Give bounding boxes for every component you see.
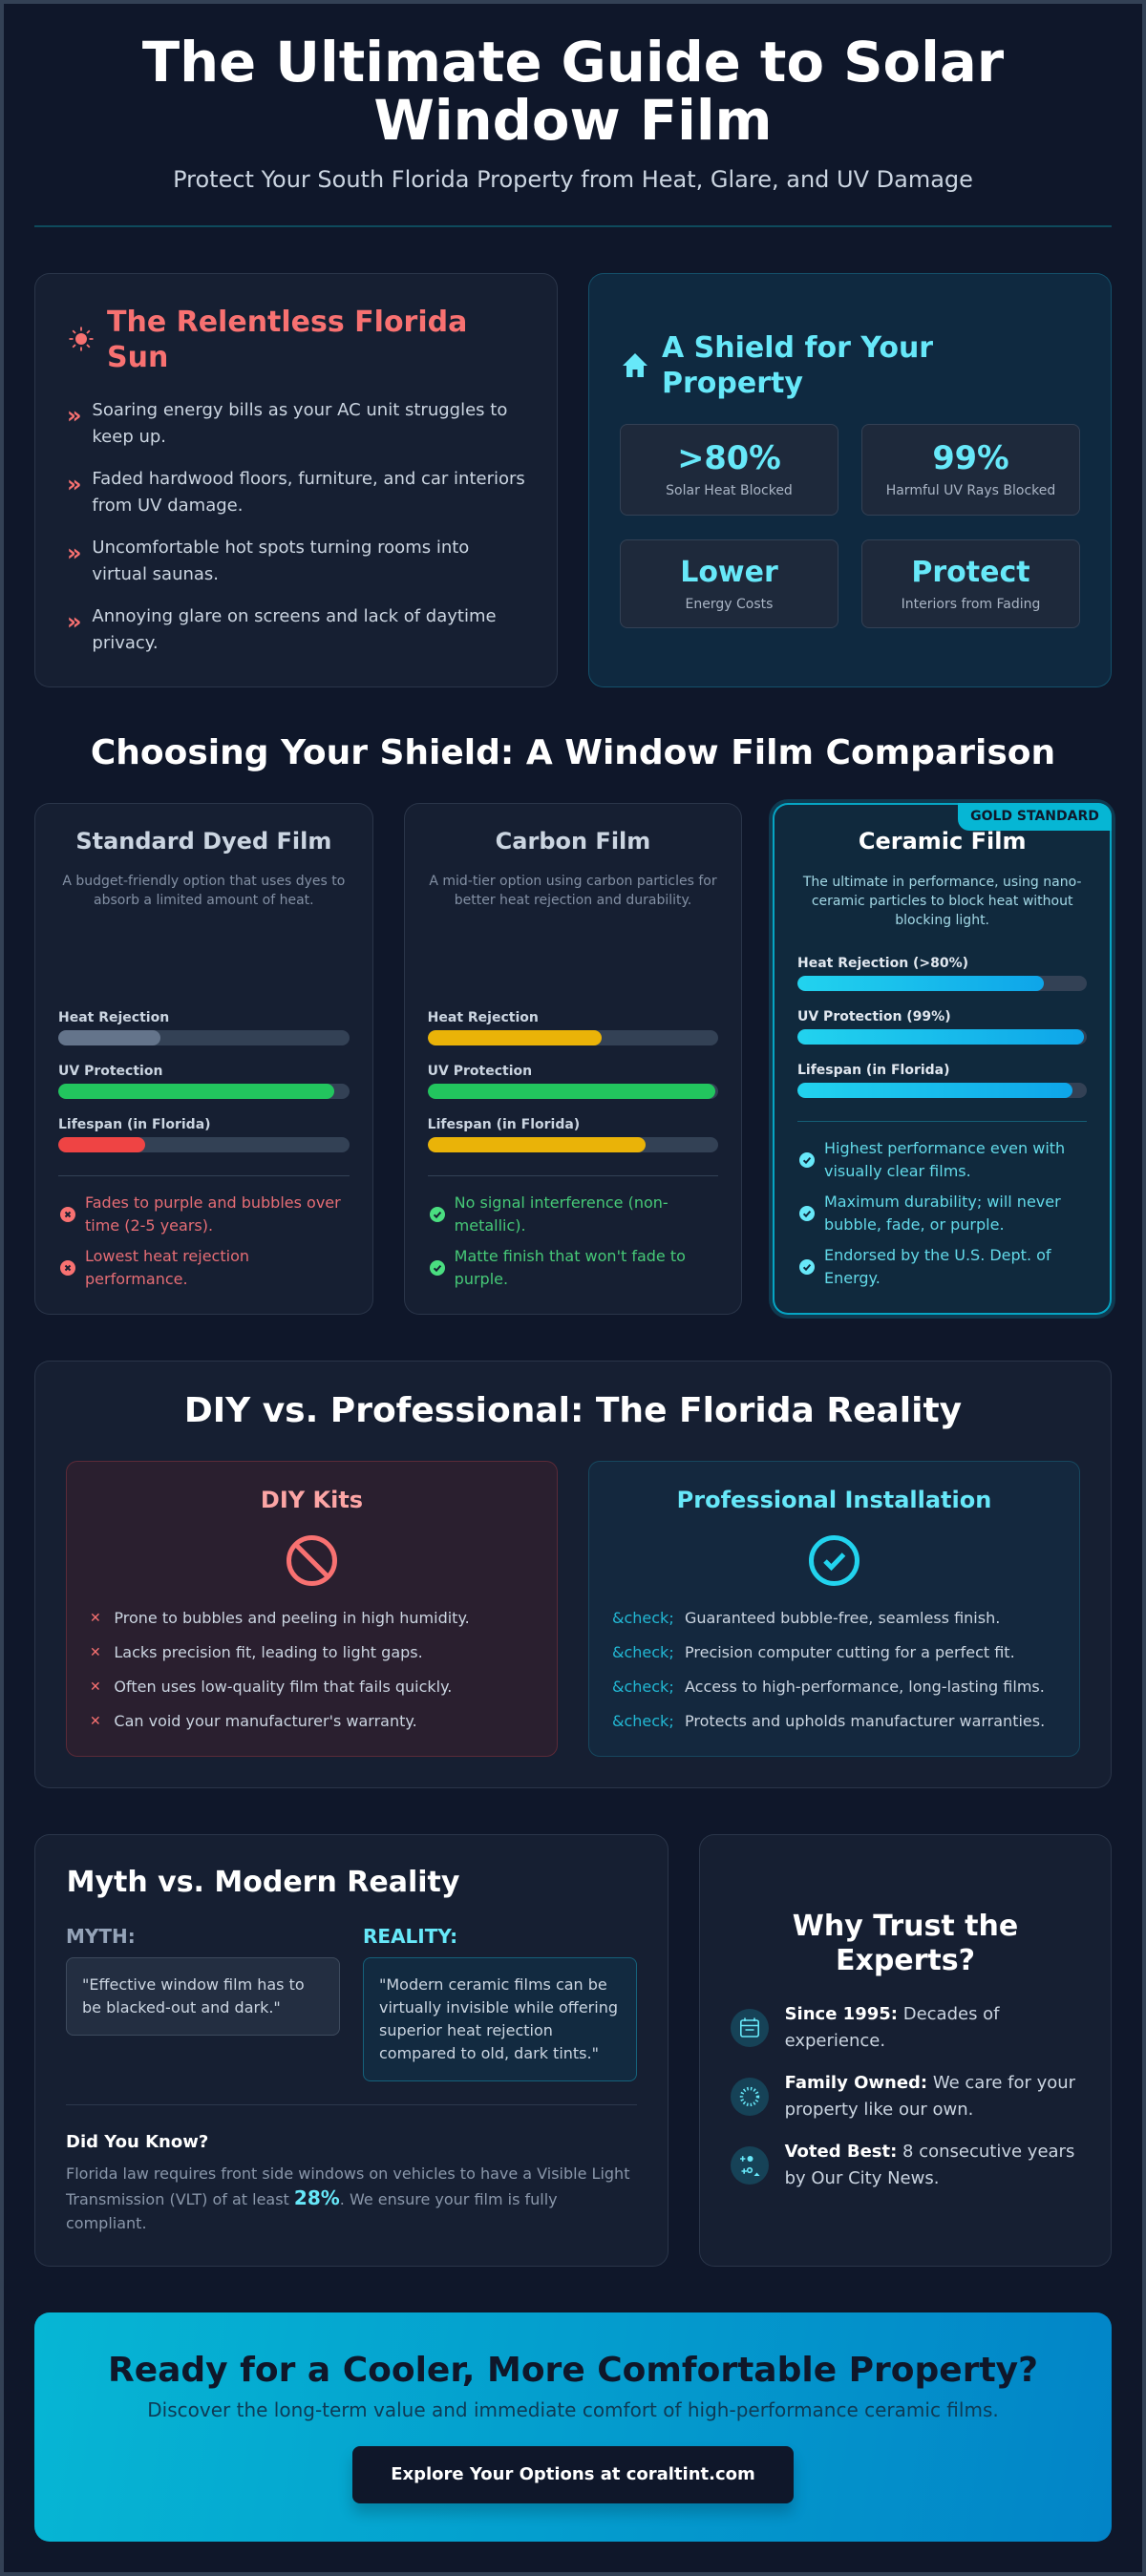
chevron: » xyxy=(67,471,82,497)
pain point: glare xyxy=(92,605,497,653)
reality quote: virtually invisible while offering xyxy=(379,1997,618,2016)
literal check mark: &check; xyxy=(612,1678,674,1696)
title: Window Film xyxy=(373,88,773,153)
heading: myth vs modern reality: Myth vs. Modern Reality xyxy=(67,1866,459,1899)
drawback: Prone to bubbles and peeling in high humidity. xyxy=(114,1609,470,1627)
pain point: hot spots: Uncomfortable hot spots turning rooms into xyxy=(92,537,469,558)
benefit: durability: Maximum durability; will never xyxy=(824,1193,1061,1211)
label: reality: REALITY: xyxy=(363,1925,457,1948)
icon: family xyxy=(731,2078,769,2116)
myth quote xyxy=(66,1957,340,2036)
bar: lifespan xyxy=(797,1062,1087,1098)
chevron: » xyxy=(67,608,82,635)
cross mark: ✕ xyxy=(90,1645,101,1660)
icon: cross xyxy=(60,1207,75,1222)
panel: professional installation xyxy=(588,1461,1080,1757)
reality quote: "Modern ceramic films can be xyxy=(379,1974,607,1994)
myth quote: be blacked-out and dark." xyxy=(82,1997,281,2016)
panel: the relentless florida sun xyxy=(34,273,558,687)
stat: energy costs xyxy=(620,539,838,628)
did you know text xyxy=(66,2163,639,2236)
pain point: energy bills xyxy=(92,399,507,447)
section heading: comparison: Choosing Your Shield: A Window Film Comparison xyxy=(91,733,1055,772)
bar: lifespan: Lifespan (in Florida) xyxy=(58,1117,211,1132)
did you know text: Transmission (VLT) of at least 28%. We ensure your film is fully xyxy=(66,2186,558,2209)
bar: heat rejection xyxy=(428,1010,718,1045)
icon: sun xyxy=(69,327,94,351)
panel: a shield for your property xyxy=(588,273,1112,687)
heading: did you know: Did You Know? xyxy=(66,2132,208,2152)
stat: solar heat xyxy=(620,424,838,516)
literal check mark: &check; xyxy=(612,1712,674,1730)
heading: why trust the experts: Why Trust the xyxy=(793,1910,1018,1943)
reality quote xyxy=(363,1957,637,2081)
bar: uv protection xyxy=(797,1008,1087,1045)
trust point: voted best: by Our City News. xyxy=(785,2168,939,2188)
drawback: Often uses low-quality film that fails quickly. xyxy=(114,1678,452,1696)
benefit: endorsement: Endorsed by the U.S. Dept. of xyxy=(824,1246,1051,1264)
heading: the relentless florida sun xyxy=(107,306,467,374)
trust point: voted best xyxy=(785,2139,1074,2192)
benefit: matte finish: Matte finish that won't fade to xyxy=(455,1247,686,1264)
did you know text: compliant. xyxy=(66,2214,147,2232)
trust point: voted best: Voted Best: 8 consecutive years xyxy=(785,2142,1074,2162)
benefit: no interference: No signal interference (non- xyxy=(455,1193,668,1211)
pain point: fading xyxy=(92,468,525,516)
cta subtext: Discover the long-term value and immediate comfort of high-performance ceramic films. xyxy=(147,2398,999,2421)
chevron: » xyxy=(67,539,82,566)
cross mark: ✕ xyxy=(90,1679,101,1695)
cross mark: ✕ xyxy=(90,1611,101,1626)
card description: A mid-tier option using carbon particles for xyxy=(429,874,717,889)
drawback: heat rejection: performance. xyxy=(85,1270,188,1287)
bar: uv protection: UV Protection (99%) xyxy=(797,1008,951,1024)
subtitle: Protect Your South Florida Property from Heat, Glare, and UV Damage xyxy=(173,166,973,193)
icon: check xyxy=(430,1260,445,1276)
pain point list xyxy=(67,399,525,653)
bar: heat rejection xyxy=(58,1010,350,1045)
bar: heat rejection: Heat Rejection (>80%) xyxy=(797,955,968,970)
panel: diy kits xyxy=(66,1461,558,1757)
drawback: heat rejection xyxy=(85,1247,249,1287)
call to action xyxy=(34,2312,1112,2542)
icon: prohibited xyxy=(286,1535,337,1586)
cta button xyxy=(352,2446,794,2503)
benefit: matte finish xyxy=(455,1247,686,1287)
trust point: family owned xyxy=(785,2070,1075,2123)
benefit: endorsement: Energy. xyxy=(824,1269,881,1287)
title xyxy=(142,31,1004,153)
bar: lifespan xyxy=(58,1117,350,1152)
card description: The ultimate in performance, using nano- xyxy=(803,875,1081,890)
card description xyxy=(429,874,717,908)
cta heading: Ready for a Cooler, More Comfortable Property? xyxy=(108,2351,1038,2390)
card description xyxy=(62,874,345,908)
bar: heat rejection: Heat Rejection xyxy=(58,1010,169,1025)
icon: calendar xyxy=(731,2009,769,2047)
bar: heat rejection xyxy=(797,955,1087,991)
literal check mark: &check; xyxy=(612,1609,674,1627)
bar: uv protection xyxy=(428,1064,718,1099)
card: ceramic film xyxy=(773,803,1112,1315)
card description: better heat rejection and durability. xyxy=(455,893,691,908)
icon: cross xyxy=(60,1260,75,1276)
card description: A budget-friendly option that uses dyes to xyxy=(62,874,345,889)
chevron: » xyxy=(67,402,82,429)
stat label: Solar Heat Blocked xyxy=(666,483,793,498)
stat label: Energy Costs xyxy=(686,596,773,611)
benefit: Protects and upholds manufacturer warranties. xyxy=(685,1712,1045,1730)
drawback: Lacks precision fit, leading to light gaps. xyxy=(114,1643,423,1661)
icon: award xyxy=(731,2146,769,2185)
benefit: clear films: visually clear films. xyxy=(824,1162,971,1180)
heading: a shield for your property: A Shield for Your xyxy=(662,331,933,365)
benefit: durability xyxy=(824,1193,1061,1234)
stat value: 99% xyxy=(932,439,1009,476)
title: The Ultimate Guide to Solar xyxy=(142,31,1004,95)
icon: check xyxy=(799,1259,815,1275)
benefit: Access to high-performance, long-lasting films. xyxy=(685,1678,1045,1696)
icon: check xyxy=(799,1206,815,1221)
heading: a shield for your property xyxy=(662,331,933,400)
card description xyxy=(802,875,1081,928)
benefit: no interference xyxy=(455,1193,668,1234)
heading: professional installation: Professional Installation xyxy=(677,1487,991,1513)
card title: Standard Dyed Film xyxy=(75,828,331,855)
trust point: since 1995 xyxy=(785,2001,1000,2055)
trust point: family owned: Family Owned: We care for your xyxy=(785,2073,1075,2093)
stat: uv rays xyxy=(861,424,1080,516)
myth quote: "Effective window film has to xyxy=(82,1974,305,1994)
badge: gold standard xyxy=(958,803,1112,831)
drawback: fading xyxy=(85,1193,341,1234)
bar: heat rejection: Heat Rejection xyxy=(428,1010,539,1025)
heading: the relentless florida sun: The Relentless Florida xyxy=(107,306,467,338)
icon: check circle xyxy=(809,1535,860,1586)
heading: diy kits: DIY Kits xyxy=(261,1487,363,1513)
professional benefit list xyxy=(612,1609,1045,1730)
reality quote: superior heat rejection xyxy=(379,2020,553,2039)
pain point: energy bills: Soaring energy bills as your AC unit struggles to xyxy=(92,399,507,420)
heading: a shield for your property: Property xyxy=(662,367,803,400)
bar: lifespan xyxy=(428,1117,718,1152)
benefit: endorsement xyxy=(824,1246,1051,1287)
stat value: >80% xyxy=(677,439,781,476)
card: carbon film xyxy=(404,803,742,1315)
bar: lifespan: Lifespan (in Florida) xyxy=(428,1117,580,1132)
stat value: Lower xyxy=(680,556,778,589)
trust point: family owned: property like our own. xyxy=(785,2100,973,2120)
card description: absorb a limited amount of heat. xyxy=(94,893,314,908)
drawback: Can void your manufacturer's warranty. xyxy=(114,1712,417,1730)
pain point: glare: Annoying glare on screens and lack of daytime xyxy=(92,605,497,626)
pain point: energy bills: keep up. xyxy=(92,426,166,447)
drawback: heat rejection: Lowest heat rejection xyxy=(85,1247,249,1264)
card: standard dyed film xyxy=(34,803,373,1315)
stat: interiors xyxy=(861,539,1080,628)
cta button: Explore Your Options at coraltint.com xyxy=(391,2464,755,2484)
diy drawback list xyxy=(90,1609,470,1730)
badge: gold standard: GOLD STANDARD xyxy=(970,809,1099,824)
drawback: fading: Fades to purple and bubbles over xyxy=(85,1193,341,1211)
icon: house xyxy=(623,353,647,377)
section heading: diy vs professional: DIY vs. Professional: The Florida Reality xyxy=(184,1391,962,1430)
card title: Carbon Film xyxy=(496,828,650,855)
benefit: clear films xyxy=(824,1139,1065,1180)
drawback: fading: time (2-5 years). xyxy=(85,1216,213,1234)
benefit: matte finish: purple. xyxy=(455,1270,508,1287)
stat label: Interiors from Fading xyxy=(902,596,1040,611)
heading: why trust the experts xyxy=(699,1910,1112,1978)
benefit: durability: bubble, fade, or purple. xyxy=(824,1215,1005,1234)
pain point: hot spots xyxy=(92,537,469,584)
literal check mark: &check; xyxy=(612,1643,674,1661)
bar: uv protection: UV Protection xyxy=(428,1064,532,1079)
pain point: glare: privacy. xyxy=(92,632,159,653)
trust point: since 1995: Since 1995: Decades of xyxy=(785,2004,1000,2024)
trust point: since 1995: experience. xyxy=(785,2031,885,2051)
pain point: fading: from UV damage. xyxy=(92,495,243,516)
pain point: fading: Faded hardwood floors, furniture, and car interiors xyxy=(92,468,525,489)
benefit: Precision computer cutting for a perfect fit. xyxy=(685,1643,1015,1661)
stat value: Protect xyxy=(911,556,1030,589)
panel: diy vs professional xyxy=(34,1361,1112,1788)
card description: ceramic particles to block heat without xyxy=(812,894,1072,909)
icon: check xyxy=(799,1152,815,1168)
bar: lifespan: Lifespan (in Florida) xyxy=(797,1062,950,1077)
benefit: no interference: metallic). xyxy=(455,1216,526,1234)
benefit: clear films: Highest performance even with xyxy=(824,1139,1065,1157)
panel: myth vs reality xyxy=(34,1834,668,2267)
stat label: Harmful UV Rays Blocked xyxy=(886,483,1055,498)
heading: why trust the experts: Experts? xyxy=(836,1944,975,1977)
cross mark: ✕ xyxy=(90,1714,101,1729)
benefit: Guaranteed bubble-free, seamless finish. xyxy=(685,1609,1000,1627)
heading: the relentless florida sun: Sun xyxy=(107,340,168,374)
bar: uv protection xyxy=(58,1064,350,1099)
reality quote: compared to old, dark tints." xyxy=(379,2043,599,2062)
card description: blocking light. xyxy=(895,913,989,928)
panel: why trust the experts xyxy=(699,1834,1112,2267)
icon: check xyxy=(430,1207,445,1222)
label: myth: MYTH: xyxy=(66,1925,136,1948)
card title: Ceramic Film xyxy=(859,828,1026,855)
bar: uv protection: UV Protection xyxy=(58,1064,162,1079)
did you know text: Florida law requires front side windows on vehicles to have a Visible Light xyxy=(66,2164,629,2183)
pain point: hot spots: virtual saunas. xyxy=(92,563,219,584)
